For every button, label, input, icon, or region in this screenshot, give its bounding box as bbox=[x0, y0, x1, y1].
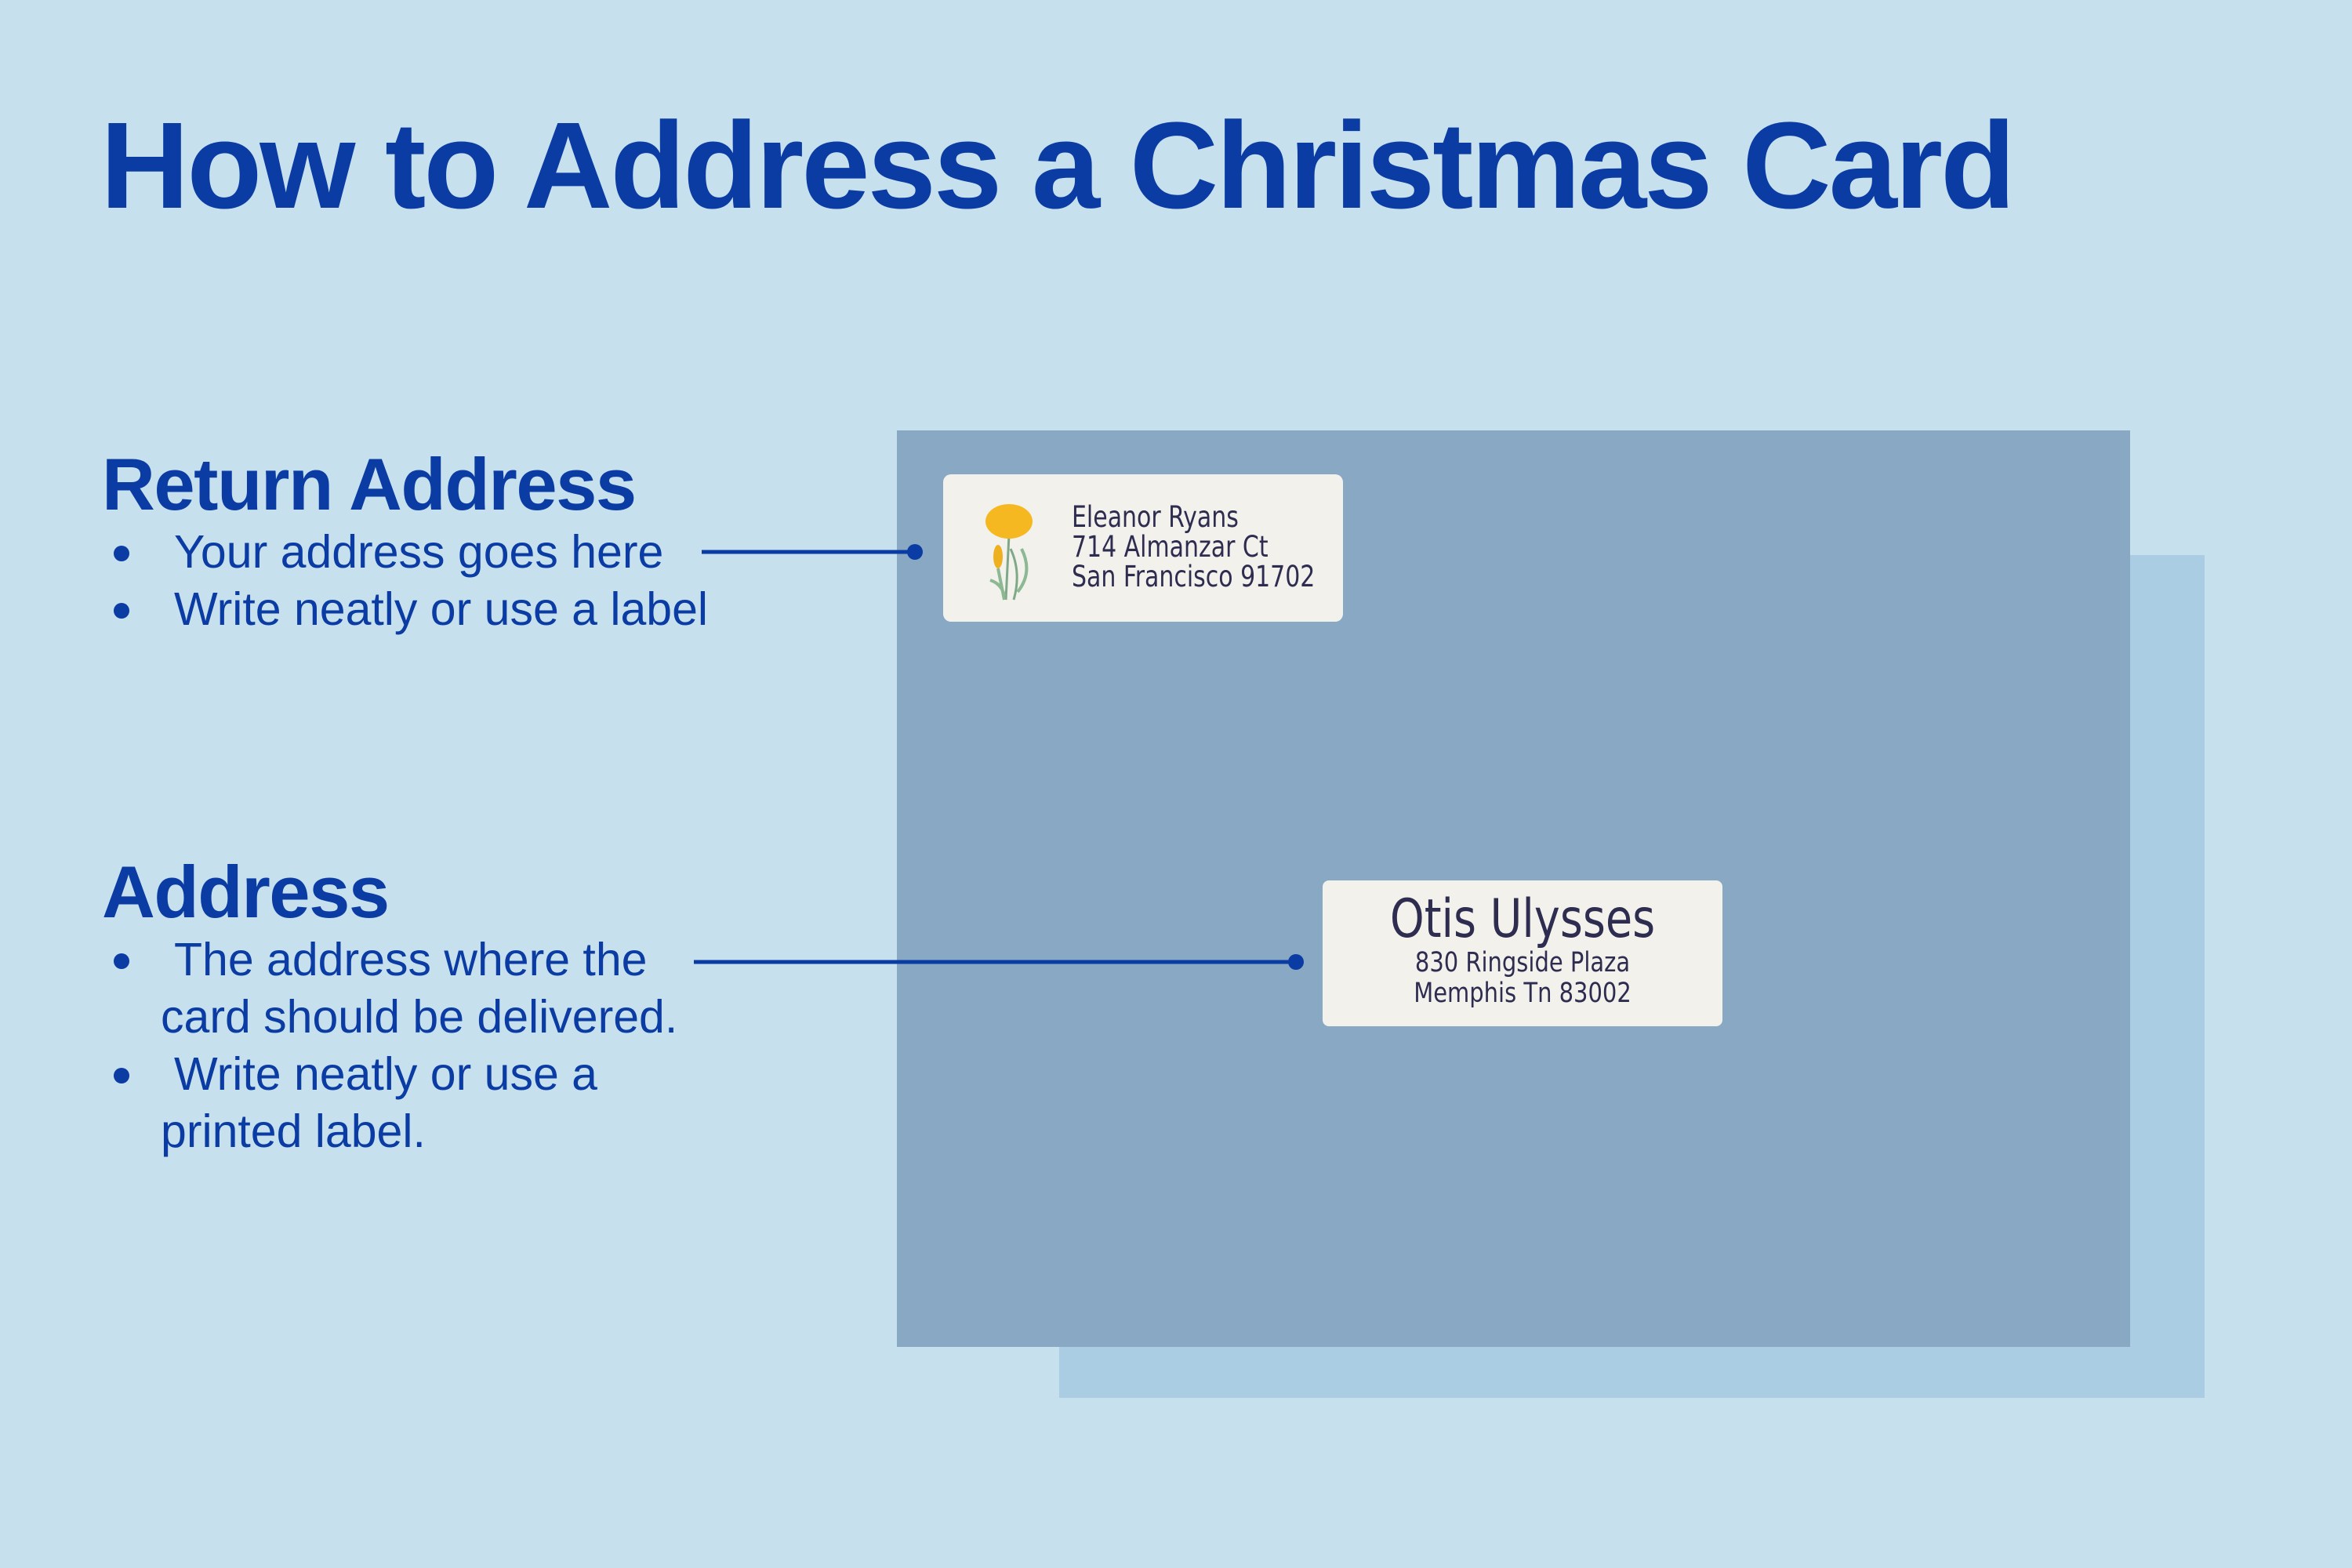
recipient address label: Memphis Tn 83002 bbox=[1414, 978, 1632, 1009]
bullets: address: The address where the bbox=[174, 934, 647, 985]
return address text: San Francisco 91702 bbox=[1072, 560, 1315, 593]
bullets: address: card should be delivered. bbox=[161, 991, 677, 1043]
bullets: address bbox=[114, 934, 677, 1157]
return address text: 714 Almanzar Ct bbox=[1072, 530, 1269, 564]
return address text bbox=[1072, 500, 1315, 593]
bullets: return address bbox=[114, 526, 708, 635]
bullets: address: Write neatly or use a bbox=[174, 1048, 597, 1100]
title: How to Address a Christmas Card bbox=[100, 97, 2013, 234]
bullets: return address: Write neatly or use a label bbox=[174, 583, 708, 635]
icon: poppy flower bbox=[985, 504, 1033, 601]
return address text: Eleanor Ryans bbox=[1072, 500, 1239, 534]
bullets: address: printed label. bbox=[161, 1105, 426, 1157]
arrow: return address connector bbox=[702, 544, 923, 560]
heading: Address: Address bbox=[102, 851, 389, 933]
bullets: return address: Your address goes here bbox=[174, 526, 663, 578]
arrow: address connector bbox=[694, 954, 1304, 970]
envelope bbox=[897, 430, 2130, 1347]
envelope shadow bbox=[1059, 555, 2205, 1398]
recipient address label bbox=[1323, 880, 1722, 1026]
heading: Return Address: Return Address bbox=[102, 443, 636, 525]
recipient address label: 830 Ringside Plaza bbox=[1415, 947, 1630, 978]
return address label bbox=[943, 474, 1343, 622]
recipient address label: Otis Ulysses bbox=[1390, 888, 1655, 950]
